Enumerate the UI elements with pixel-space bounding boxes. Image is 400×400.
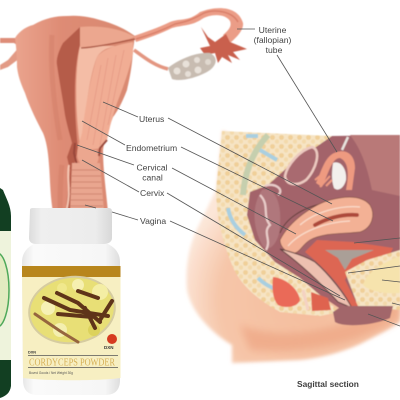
label: vagina: Vagina (140, 216, 166, 226)
labia (333, 306, 393, 325)
label: cervix: Cervix (140, 188, 165, 198)
label: cervical canal: canal (142, 172, 163, 182)
blue vessels (228, 136, 278, 290)
broad ligament outline (280, 203, 325, 233)
green bottle (0, 188, 11, 398)
oval photo (24, 270, 120, 350)
leader lines (77, 29, 400, 326)
brand: DXN (28, 350, 36, 354)
ovary (168, 53, 216, 80)
bottle body (22, 244, 120, 395)
gold band (22, 266, 120, 277)
label: uterine tube: Uterine (259, 25, 286, 35)
pale peritoneum (350, 135, 400, 196)
intestine loop (285, 147, 317, 184)
illustration: sagittal section (186, 130, 400, 363)
pale streak (342, 137, 348, 150)
logo: DXN (104, 345, 114, 350)
peritoneal cavity (247, 135, 400, 312)
right fallopian tube (134, 8, 243, 43)
fascia band (243, 135, 268, 195)
fallopian and ovary (315, 151, 355, 190)
cut cavity (57, 27, 80, 210)
pubic bone (363, 256, 400, 293)
left fallopian tube stub (0, 38, 26, 70)
pubic fat (345, 250, 400, 310)
label: uterine tube: (fallopian) (254, 35, 291, 45)
label: uterine tube: tube (266, 45, 283, 55)
cap (29, 208, 112, 244)
bladder (305, 240, 393, 308)
labels (126, 25, 359, 389)
green ring (0, 253, 9, 327)
logo (104, 334, 117, 350)
skin shadow (240, 300, 400, 351)
illustration: frontal uterus (0, 8, 247, 212)
cervix (77, 147, 99, 163)
bottle label (0, 231, 11, 360)
label: endometrium: Endometrium (126, 143, 177, 153)
label: cervical canal: Cervical (136, 162, 168, 172)
label (22, 266, 120, 380)
uterus muscle wall (78, 42, 133, 149)
cordyceps (44, 291, 112, 328)
vagina rugae (70, 163, 104, 212)
net weight: Bovnd Goods / Net Weight 30g (29, 371, 73, 375)
product name: CORDYCEPS POWDER (29, 358, 115, 368)
uterus (280, 197, 373, 253)
skin (186, 130, 400, 363)
upper muscle (80, 26, 135, 47)
Cordyceps bottle (22, 208, 120, 395)
vaginal canal (280, 249, 352, 308)
fold shading (51, 35, 62, 210)
fimbriae (200, 27, 247, 63)
uterus body (15, 16, 135, 212)
caption: Sagittal section (297, 379, 359, 389)
convoluted bowel (254, 189, 280, 248)
anal tissue (273, 277, 300, 307)
ovarian ligament (134, 50, 168, 69)
fat layer (216, 131, 340, 316)
endometrial cavity (315, 215, 357, 225)
inner lining (76, 46, 115, 145)
label: uterus: Uterus (139, 114, 164, 124)
